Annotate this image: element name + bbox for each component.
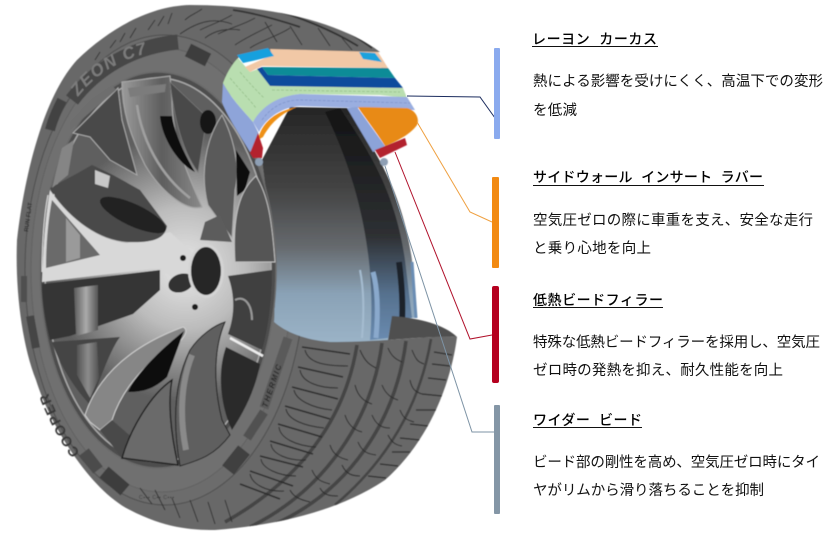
sidewall small marks: C▪▪▪ C▪▪ C▪▪▪ bbox=[139, 495, 175, 501]
tire body bbox=[16, 4, 458, 531]
tire illustration bbox=[16, 4, 458, 531]
text block: low heat bead filler: 特殊な低熱ビードフィラーを採用し、空気圧 bbox=[533, 334, 820, 351]
sidewall text: COOPER: COOPER bbox=[40, 394, 78, 458]
layer: cyan strips bbox=[237, 48, 274, 63]
text block: sidewall insert rubber: と乗り心地を向上 bbox=[533, 240, 651, 257]
bar: wider bead bbox=[494, 405, 500, 514]
front tread sipes bbox=[140, 347, 452, 524]
tire cross section bbox=[222, 48, 418, 166]
text block: sidewall insert rubber bbox=[533, 169, 813, 257]
leader line: bead filler bbox=[395, 152, 492, 339]
leader line: wider bead bbox=[385, 166, 494, 432]
rim stripes left bbox=[42, 186, 56, 272]
leader line: rayon carcass bbox=[407, 96, 495, 118]
sidewall text: ZEON C7: ZEON C7 bbox=[71, 42, 145, 97]
hub bbox=[166, 270, 196, 296]
sidewall dark patches bbox=[24, 42, 288, 490]
text block: wider bead bbox=[533, 412, 820, 499]
layer: teal belt bbox=[262, 67, 395, 78]
text block: rayon carcass: 熱による影響を受けにくく、高温下での変形 bbox=[533, 73, 824, 90]
text block: low heat bead filler: ゼロ時の発熱を抑え、耐久性能を向上 bbox=[533, 362, 783, 379]
lower spoke bbox=[85, 327, 186, 430]
text block: sidewall insert rubber: 空気圧ゼロの際に車重を支え、安全な走行 bbox=[533, 212, 813, 229]
layer: rayon carcass arc bbox=[253, 94, 415, 132]
bar: low heat bead filler bbox=[492, 286, 499, 383]
upper left window bbox=[73, 88, 137, 175]
lower left pocket bbox=[42, 270, 160, 340]
right windows bbox=[221, 347, 260, 430]
text block: rayon carcass bbox=[532, 31, 824, 119]
layer: navy belt bbox=[257, 67, 403, 88]
alloy wheel bbox=[40, 72, 276, 468]
bar: sidewall insert rubber bbox=[492, 177, 499, 268]
layer: beads bbox=[255, 158, 263, 166]
text block: wider bead: ビード部の剛性を高め、空気圧ゼロ時にタイ bbox=[533, 454, 820, 471]
layer: green tread base bbox=[223, 58, 407, 122]
text block: low heat bead filler bbox=[533, 292, 820, 379]
leader line: sidewall insert bbox=[417, 122, 492, 222]
text block: wider bead: ヤがリムから滑り落ちることを抑制 bbox=[533, 482, 764, 499]
sidewall text: THERMIC: THERMIC bbox=[260, 362, 284, 409]
text block: low heat bead filler: 低熱ビードフィラー bbox=[533, 292, 663, 308]
layer: red bead filler right bbox=[375, 138, 407, 158]
text block: rayon carcass: を低減 bbox=[533, 102, 578, 119]
upper right window bbox=[170, 82, 207, 172]
bright spoke upper left bbox=[42, 190, 192, 292]
layer: orange insert left bbox=[258, 107, 297, 140]
text block: sidewall insert rubber: サイドウォール インサート ラバー bbox=[533, 169, 763, 185]
layer: red bead filler left bbox=[250, 133, 263, 158]
layer: orange insert right bbox=[358, 107, 418, 146]
front tread grooves bbox=[225, 339, 431, 527]
lower left window bbox=[52, 337, 120, 405]
text block: wider bead: ワイダー ビード bbox=[533, 412, 642, 428]
tire interior bbox=[262, 107, 416, 342]
text block: rayon carcass: レーヨン カーカス bbox=[532, 31, 657, 47]
layer: outer rayon carcass left bbox=[222, 83, 260, 152]
layer: right carcass bbox=[347, 107, 385, 152]
lower triangular spoke bbox=[122, 380, 178, 465]
lower right spoke bbox=[176, 322, 230, 466]
layer: tan belt bbox=[245, 49, 388, 72]
sidewall text: RUN FLAT: RUN FLAT bbox=[24, 202, 34, 232]
folded cut edge of tread bbox=[388, 316, 457, 340]
left barrel window bbox=[46, 200, 100, 268]
upper tread pattern bbox=[95, 8, 372, 60]
right spoke group bbox=[204, 115, 237, 238]
bar: rayon carcass bbox=[494, 48, 500, 139]
upper left pocket bbox=[50, 165, 167, 242]
upper spoke bbox=[122, 76, 202, 208]
